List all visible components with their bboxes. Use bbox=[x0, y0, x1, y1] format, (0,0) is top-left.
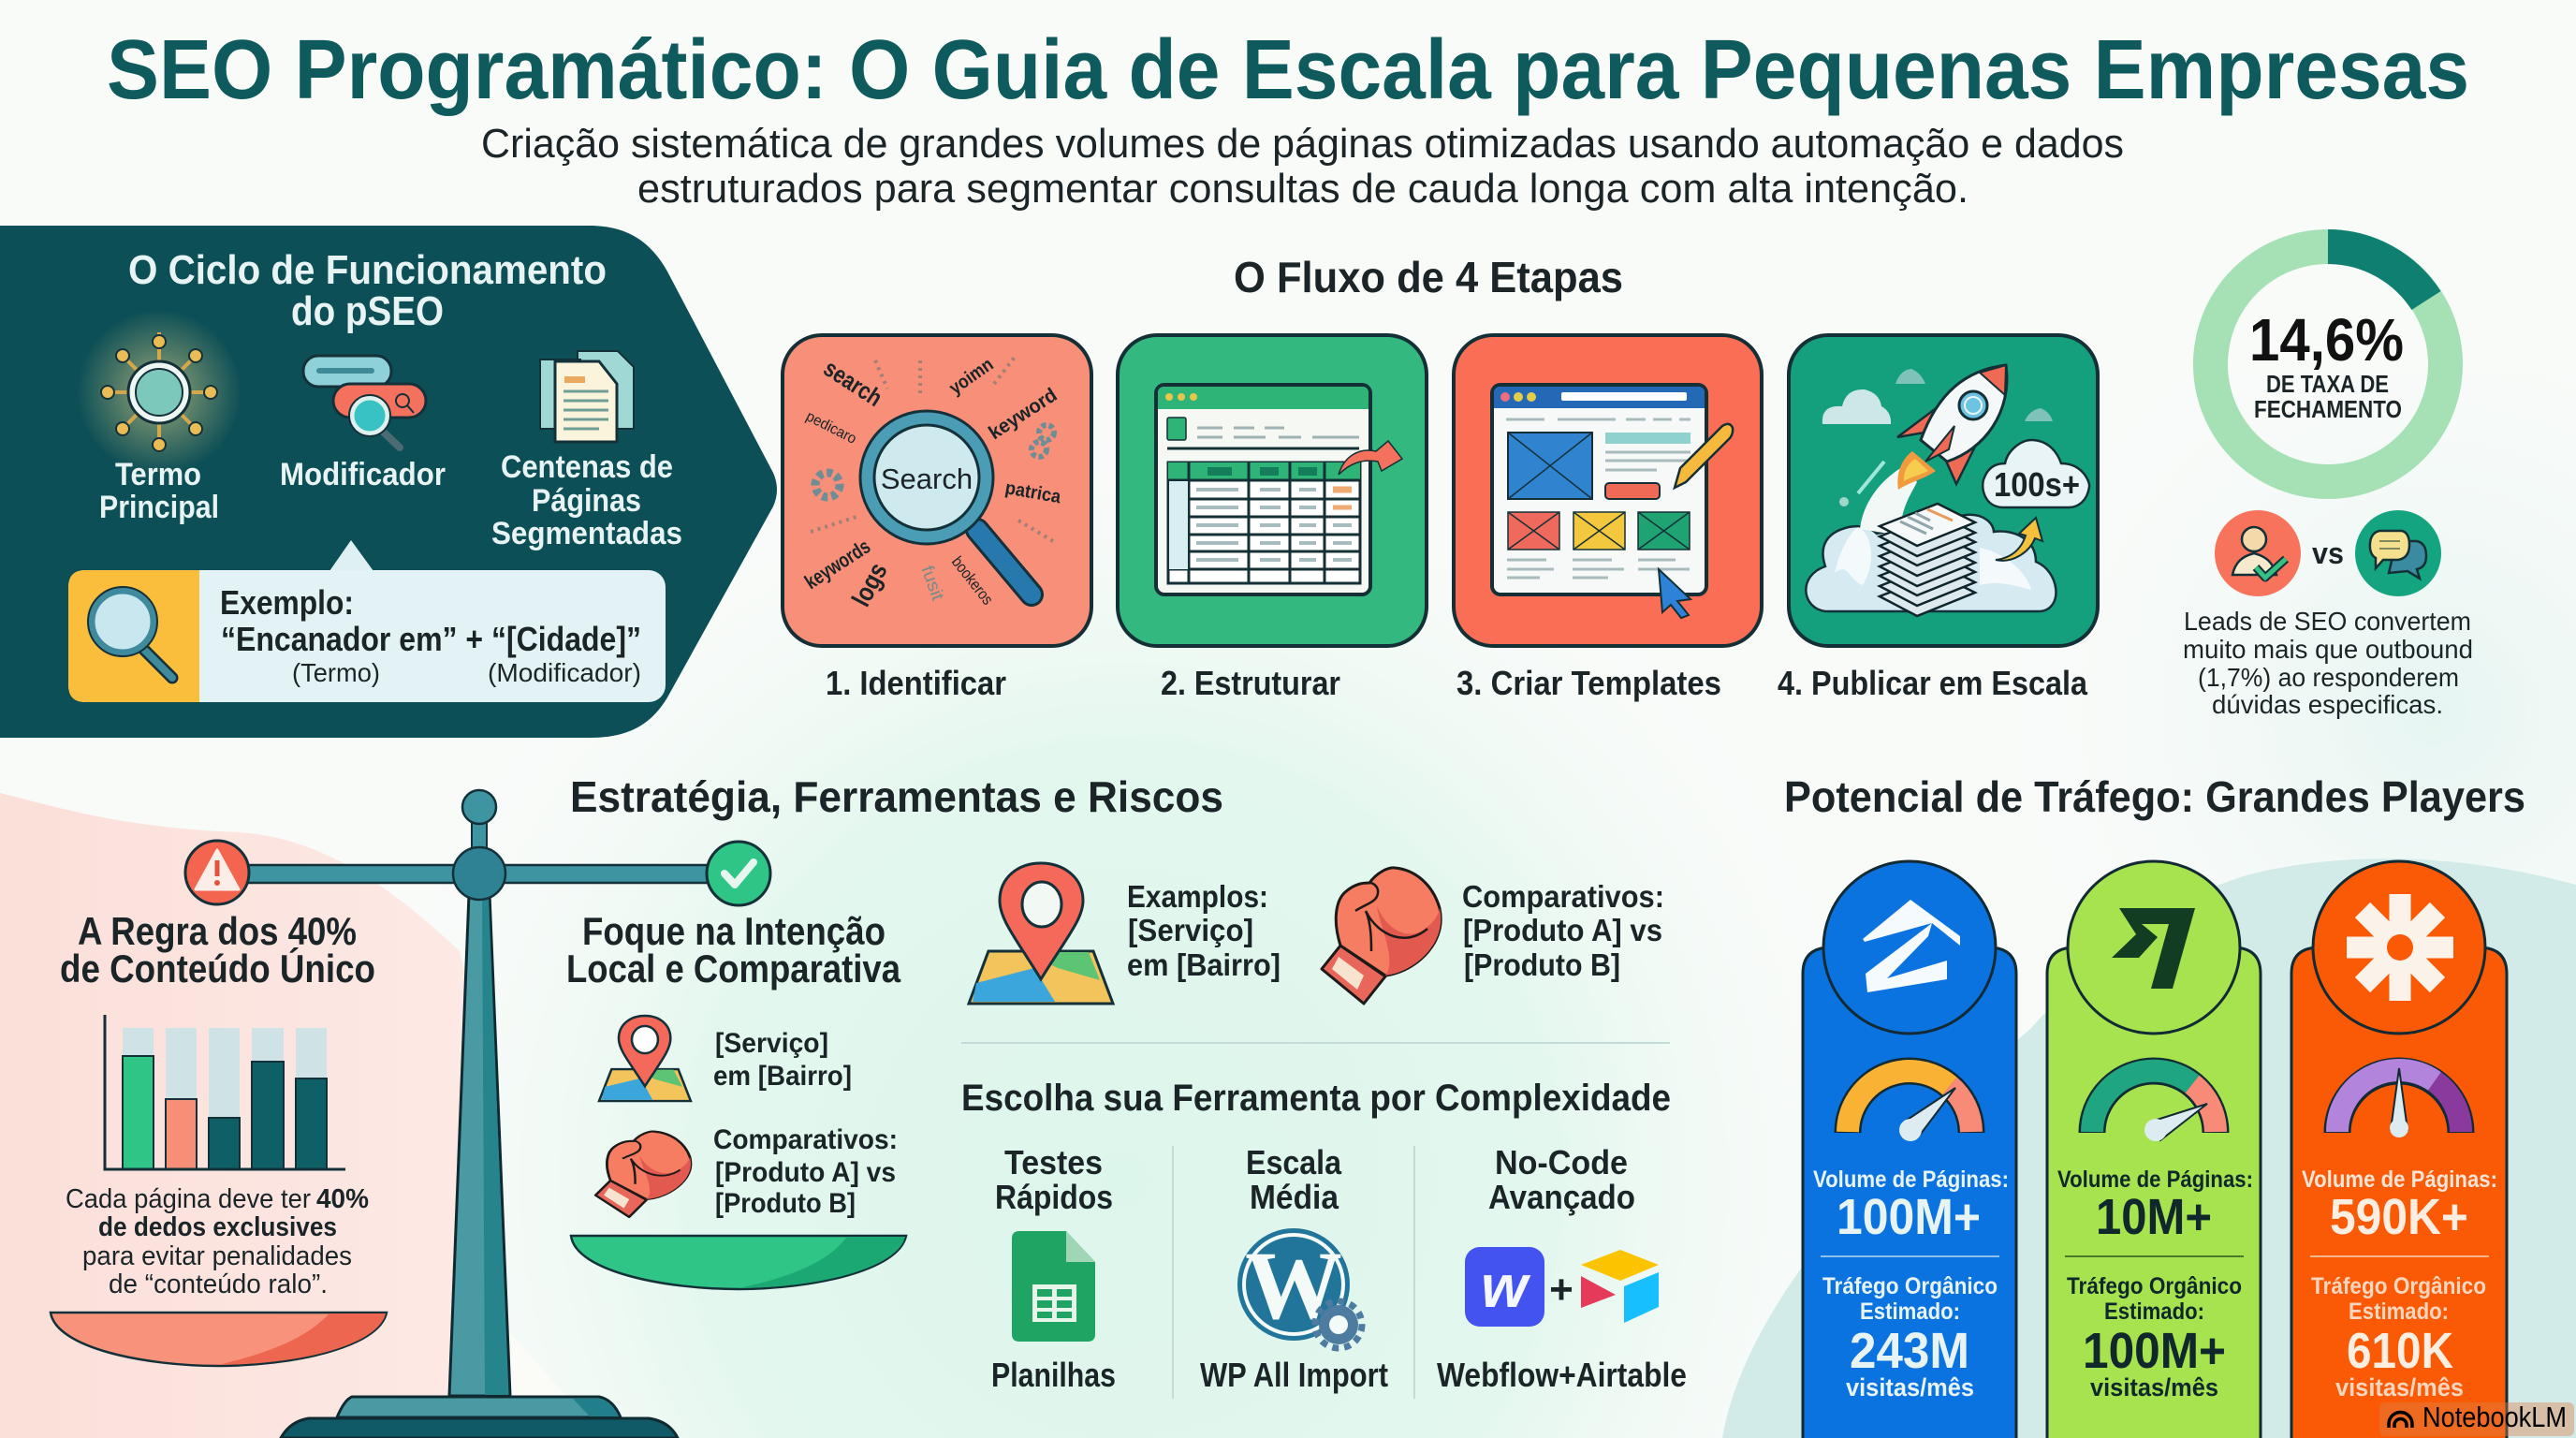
icon: modificador pills bbox=[303, 356, 426, 448]
heading: foque: Foque na Intenção bbox=[582, 909, 886, 953]
scale pan: red bbox=[51, 1313, 387, 1366]
text: regra body bbox=[66, 1184, 369, 1299]
gauge bbox=[2337, 1068, 2461, 1137]
text: servico em bairro bbox=[713, 1028, 852, 1092]
label: centenas de paginas segmentadas: Segmentadas bbox=[491, 516, 682, 551]
subtitle: estruturados para segmentar consultas de cauda longa com alta intenção. bbox=[637, 166, 1969, 212]
label: termo principal bbox=[99, 457, 219, 525]
card: wise: visitas/mês bbox=[2090, 1373, 2218, 1401]
text: comparativos: [Produto A] vs bbox=[1463, 913, 1662, 947]
label: termo principal: Termo bbox=[115, 457, 201, 492]
card: zapier: 610K bbox=[2347, 1323, 2453, 1379]
label: criar templates: 3. Criar Templates bbox=[1456, 664, 1721, 702]
panel: foque na intencao bbox=[566, 909, 901, 1219]
tool: webflow airtable: Webflow+Airtable bbox=[1437, 1356, 1687, 1394]
heading: estrategia: Estratégia, Ferramentas e Riscos bbox=[570, 772, 1223, 821]
card: zapier: Estimado: bbox=[2349, 1299, 2449, 1325]
icon: template window bbox=[1492, 385, 1733, 618]
icon: rocket bbox=[1897, 365, 2007, 484]
card: publicar em escala bbox=[1789, 335, 2098, 646]
card: zapier: visitas/mês bbox=[2335, 1373, 2464, 1401]
panel: regra dos 40% bbox=[60, 909, 375, 1299]
tool: wp all import bbox=[1200, 1143, 1388, 1394]
donut chart: 14,6%: DE TAXA DE bbox=[2266, 370, 2389, 398]
card: zillow: Tráfego Orgânico bbox=[1822, 1273, 1998, 1299]
callout: exemplo: “Encanador em” + “[Cidade]” bbox=[221, 620, 641, 658]
tool: webflow airtable: No-Code bbox=[1495, 1143, 1628, 1181]
card: wise: 100M+ bbox=[2083, 1323, 2226, 1379]
card: zillow: 243M bbox=[1850, 1323, 1969, 1379]
text: leads de seo bbox=[2183, 607, 2473, 719]
icon: check bbox=[707, 842, 770, 905]
card: estruturar bbox=[1118, 335, 1427, 646]
bar chart bbox=[105, 1015, 345, 1169]
icon: termo principal hub bbox=[77, 310, 242, 475]
cloud base bbox=[1806, 515, 2056, 611]
keyword cloud: keyword bbox=[985, 384, 1061, 444]
tool: webflow airtable: Avançado bbox=[1488, 1178, 1635, 1216]
heading: regra: de Conteúdo Único bbox=[60, 946, 375, 990]
gauge bbox=[1848, 1071, 1971, 1141]
text: comparativos small: [Produto B] bbox=[715, 1188, 856, 1219]
icon: spreadsheet window bbox=[1156, 385, 1402, 594]
keyword cloud: fusit bbox=[916, 564, 947, 604]
icon: webflow bbox=[1465, 1247, 1544, 1327]
text: servico em bairro: [Serviço] bbox=[715, 1028, 828, 1059]
keyword cloud: keywords bbox=[800, 535, 874, 594]
gauge bbox=[2092, 1071, 2216, 1141]
balance scale bbox=[51, 790, 906, 1438]
logo: wise bbox=[2112, 908, 2195, 989]
text: leads de seo: dúvidas especificas. bbox=[2212, 690, 2443, 719]
icon: magnifier search: Search bbox=[881, 462, 973, 495]
icon: boxing glove small bbox=[595, 1132, 691, 1217]
text: leads de seo: Leads de SEO convertem bbox=[2184, 607, 2471, 636]
icon: lead person bbox=[2215, 510, 2301, 596]
label: identificar: 1. Identificar bbox=[826, 664, 1006, 702]
logo: zillow bbox=[1863, 900, 1960, 992]
text: comparativos: Comparativos: bbox=[1462, 879, 1664, 914]
label: vs: vs bbox=[2312, 536, 2344, 570]
heading: foque: Local e Comparativa bbox=[566, 946, 901, 990]
text: leads de seo: (1,7%) ao responderem bbox=[2198, 663, 2459, 692]
donut chart: 14,6% bbox=[2211, 247, 2445, 481]
card: zapier: Volume de Páginas: bbox=[2302, 1167, 2497, 1193]
callout: exemplo: Exemplo: bbox=[220, 583, 354, 622]
heading: ciclo: O Ciclo de Funcionamento bbox=[128, 247, 607, 293]
keyword cloud: search bbox=[819, 354, 887, 412]
icon: webflow: w bbox=[1481, 1253, 1531, 1320]
tool: planilhas bbox=[991, 1143, 1116, 1394]
subtitle bbox=[481, 121, 2124, 212]
heading: ciclo bbox=[128, 247, 607, 334]
icon: pencil bbox=[1675, 424, 1733, 488]
text: comparativos small: [Produto A] vs bbox=[715, 1157, 896, 1188]
card: zillow: 100M+ bbox=[1837, 1189, 1981, 1245]
keyword cloud: bookeros bbox=[948, 553, 997, 609]
tool: planilhas: Testes bbox=[1004, 1143, 1103, 1181]
heading: escolha: Escolha sua Ferramenta por Complexidade bbox=[961, 1078, 1671, 1119]
text: regra body: 40% bbox=[316, 1184, 369, 1214]
text: examplos: [Serviço] bbox=[1128, 913, 1253, 947]
card: zapier: 590K+ bbox=[2330, 1189, 2468, 1245]
icon: growth arrow bbox=[1996, 518, 2042, 561]
heading: regra bbox=[60, 909, 375, 990]
text: leads de seo: muito mais que outbound bbox=[2183, 635, 2473, 664]
icon: magnifier bbox=[88, 587, 172, 678]
icon: boxing glove large bbox=[1322, 868, 1441, 1004]
callout: exemplo: (Modificador) bbox=[488, 658, 641, 687]
label: centenas de paginas segmentadas bbox=[491, 449, 682, 551]
heading: regra: A Regra dos 40% bbox=[78, 909, 357, 953]
tool: planilhas: Rápidos bbox=[995, 1178, 1113, 1216]
label: estruturar: 2. Estruturar bbox=[1161, 664, 1340, 702]
badge: 100s+ cloud: 100s+ bbox=[1994, 465, 2080, 504]
card: zapier: Tráfego Orgânico bbox=[2311, 1273, 2486, 1299]
card: wise: 10M+ bbox=[2096, 1189, 2212, 1245]
arrow bbox=[1339, 441, 1402, 475]
tool: wp all import: Escala bbox=[1246, 1143, 1342, 1181]
label: centenas de paginas segmentadas: Centenas de bbox=[501, 449, 673, 485]
card: zapier bbox=[2291, 861, 2507, 1438]
label: centenas de paginas segmentadas: Páginas bbox=[532, 483, 641, 519]
icon: magnifier search bbox=[860, 411, 1032, 594]
keyword cloud: patrica bbox=[1003, 477, 1063, 507]
icon: centenas de paginas bbox=[540, 351, 634, 442]
text: comparativos small bbox=[713, 1124, 898, 1219]
icon: flame bbox=[1897, 451, 1936, 490]
card: zillow bbox=[1803, 861, 2016, 1438]
heading: foque bbox=[566, 909, 901, 990]
icon: warning bbox=[185, 841, 249, 904]
card: zillow: Volume de Páginas: bbox=[1813, 1167, 2009, 1193]
subtitle: Criação sistemática de grandes volumes de páginas otimizadas usando automação e dados bbox=[481, 121, 2124, 167]
scale pan: green bbox=[571, 1236, 906, 1289]
icon: stack of pages bbox=[1880, 504, 1975, 616]
text: regra body: de dedos exclusives bbox=[98, 1212, 337, 1242]
card: criar templates bbox=[1454, 335, 1762, 646]
text: regra body: para evitar penalidades bbox=[82, 1241, 352, 1271]
card: wise: Tráfego Orgânico bbox=[2067, 1273, 2242, 1299]
text: regra body: de “conteúdo ralo”. bbox=[109, 1269, 328, 1299]
text: examplos: em [Bairro] bbox=[1127, 947, 1281, 982]
card: identificar bbox=[783, 335, 1091, 646]
keyword cloud bbox=[800, 354, 1063, 611]
tool: wp all import: WP All Import bbox=[1200, 1356, 1388, 1394]
icon: airtable bbox=[1581, 1250, 1659, 1323]
text: regra body: Cada página deve ter bbox=[66, 1184, 311, 1214]
text: comparativos small: Comparativos: bbox=[713, 1124, 898, 1155]
logo: zapier bbox=[2347, 894, 2453, 1001]
icon: chat bubbles bbox=[2355, 510, 2441, 596]
card: zillow: visitas/mês bbox=[1846, 1373, 1974, 1401]
icon: sheets bbox=[1012, 1231, 1095, 1342]
card: wise bbox=[2047, 861, 2261, 1438]
label: termo principal: Principal bbox=[99, 490, 219, 525]
title: SEO Programático: O Guia de Escala para Pequenas Empresas bbox=[107, 23, 2469, 117]
plus: + bbox=[1549, 1267, 1573, 1313]
tool: webflow airtable bbox=[1437, 1143, 1687, 1394]
panel: ciclo de funcionamento bbox=[0, 226, 777, 738]
text: examplos: Examplos: bbox=[1127, 879, 1268, 914]
donut chart: 14,6%: FECHAMENTO bbox=[2254, 395, 2402, 423]
callout: exemplo bbox=[68, 540, 666, 702]
label: publicar em escala: 4. Publicar em Escala bbox=[1778, 664, 2088, 702]
heading: potencial de trafego: Potencial de Tráfego: Grandes Players bbox=[1784, 772, 2525, 821]
smoke trail bbox=[1860, 465, 1917, 536]
icon: map pin large bbox=[969, 863, 1113, 1004]
text: comparativos bbox=[1462, 879, 1664, 982]
keyword cloud: logs bbox=[846, 558, 893, 611]
card: wise: Volume de Páginas: bbox=[2057, 1167, 2253, 1193]
text: examplos bbox=[1127, 879, 1281, 982]
card: wise: Estimado: bbox=[2104, 1299, 2204, 1325]
callout: exemplo: (Termo) bbox=[292, 658, 380, 687]
text: servico em bairro: em [Bairro] bbox=[713, 1061, 852, 1092]
keyword cloud: pedicaro bbox=[803, 408, 859, 448]
icon: map pin small bbox=[599, 1016, 691, 1101]
donut chart: 14,6%: 14,6% bbox=[2249, 306, 2404, 374]
card: zillow: Estimado: bbox=[1860, 1299, 1960, 1325]
icon: wordpress: W bbox=[1245, 1232, 1342, 1340]
badge: 100s+ cloud bbox=[1983, 440, 2089, 507]
tool: planilhas: Planilhas bbox=[991, 1356, 1116, 1394]
label: modificador: Modificador bbox=[280, 457, 446, 492]
heading: ciclo: do pSEO bbox=[291, 288, 444, 334]
icon: cursor bbox=[1659, 569, 1690, 618]
text: comparativos: [Produto B] bbox=[1464, 947, 1620, 982]
tool: wp all import: Média bbox=[1250, 1178, 1339, 1216]
keyword cloud: yoimn bbox=[945, 354, 997, 399]
heading: fluxo: O Fluxo de 4 Etapas bbox=[1234, 253, 1623, 301]
